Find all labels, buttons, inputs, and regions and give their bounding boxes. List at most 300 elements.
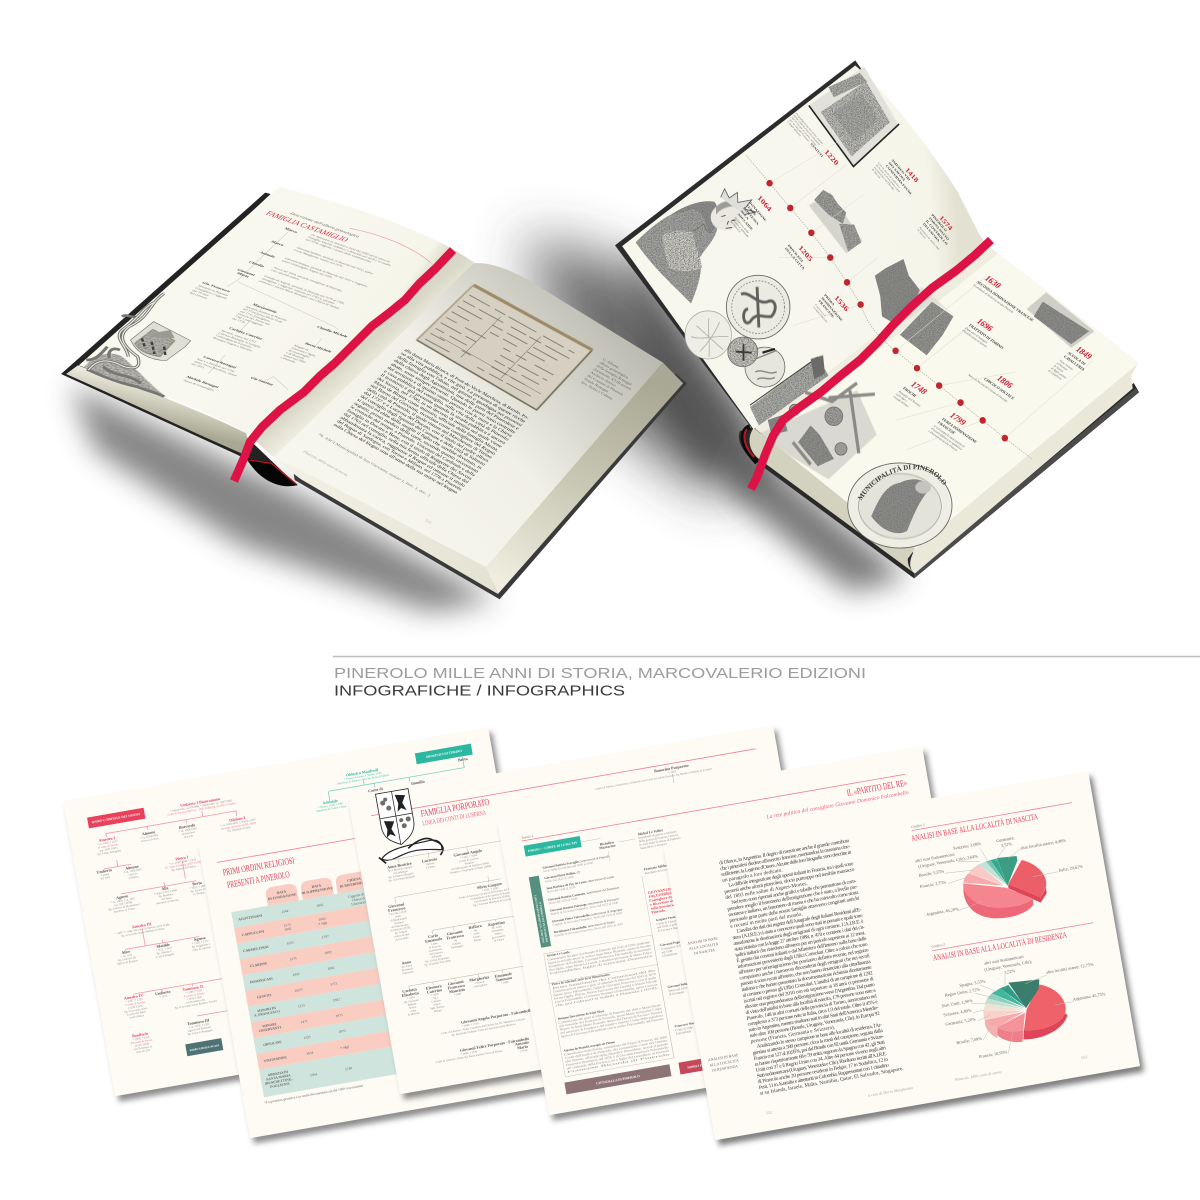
- table rows: GESUITI: [257, 993, 272, 1000]
- right page: [274, 263, 663, 567]
- 1536 Prima dominazione francese: 1536: [833, 294, 850, 313]
- 1849 Scuola di cavalleria: SCUOLA DI: [1066, 351, 1087, 366]
- 1799 Terza dominazione francese: [926, 408, 987, 456]
- family tree names: di Luserna: [429, 944, 442, 950]
- right column: political network: le sorti della Fortezza di Pinerolo: [639, 836, 681, 847]
- 1536 Prima dominazione francese: occupa Pinerolo: [812, 305, 829, 324]
- page block, far right side: [486, 363, 683, 594]
- boxed biographies: Nipote di Anne Marie Rouault, donna del Ducato di Savoia e Nicolas: [559, 1010, 664, 1033]
- 1799 Terza dominazione francese: 1799: [947, 410, 969, 427]
- pie labels: Argentina; 45,20%: [926, 906, 960, 918]
- right column: political network: Conte di Luserna: [656, 918, 679, 926]
- pie labels: [941, 954, 1106, 1060]
- table rows: 1749: [345, 1066, 353, 1071]
- wedge: altre località estere 4,48%: [997, 856, 1017, 886]
- table rows: 1625*: [294, 988, 304, 993]
- family tree names: del Marchesato di Saluzzo (1645): [451, 861, 489, 871]
- vertical banner: PRESIDIATA DA FALCOMBELLO: [539, 902, 549, 942]
- family tree names: Cattina: [452, 941, 462, 946]
- essay body text: iscritti nel registro del 2010 con età superiore ai 18 anni ci permette di: [743, 976, 875, 1005]
- essay body text: montese e italiano, un fenomeno di massa e che ha coinvolto come storia: [728, 889, 860, 918]
- essay body text: di Olmos, in Argentina. Il degno di menzione anche il grande contributo: [719, 838, 850, 867]
- pie labels: altre località estere; 12,75%: [1045, 961, 1095, 976]
- family tree biographies: Moglie di: [293, 344, 310, 351]
- 1799 Terza dominazione francese: Pinerolo dichiara la repubblica: [929, 426, 964, 451]
- red and grey family tree names: Sp. Guya di Borgogna: [187, 1028, 214, 1036]
- family tree names: Sp.: [474, 928, 478, 932]
- family tree names: Marco: [270, 240, 285, 247]
- family tree names: Antonio: [515, 1039, 529, 1047]
- family tree names: Sp. I Claudia Trucchetti: [424, 958, 451, 967]
- essay body text: che i pinerolesi diedero all'esercito francese, meritandosi la massima cinc-: [720, 843, 851, 872]
- table rows: 1802: [318, 917, 326, 922]
- infographic sheet 5: emigration analysis text and pie charts: [663, 770, 1144, 1146]
- chart heading two: ANALISI IN BASE ALLA LOCALITÀ DI RESIDENZA: [932, 929, 1068, 963]
- 1748 Trattato: sulle Alpi e: [895, 392, 909, 403]
- subtitle: linea dei conti di Luserna: LINEA DEI CONTI DI LUSERNA: [422, 810, 487, 827]
- red and grey family tree names: Aimone: [141, 829, 156, 836]
- wedge: Argentina 45,20%: [963, 883, 1033, 908]
- icon: Porporato coat of arms: [368, 784, 444, 865]
- title: famiglia Porporato: FAMIGLIA PORPORATO: [420, 797, 490, 820]
- left open book: [61, 187, 687, 599]
- 1064 Donazione: ADELAIDE: [737, 212, 754, 232]
- family tree names: conte: [410, 1008, 417, 1013]
- 1205 Prime istituzioni: [784, 237, 815, 271]
- pie labels: Francia; 3,75%: [920, 879, 947, 890]
- pie labels: Brasile; 5,55%: [918, 868, 945, 879]
- wedge: Spagna 3,55%: [992, 988, 1025, 1007]
- 1220 Statuti: Promulgazione dei primi statuti: [794, 111, 824, 145]
- family tree names: Anna: [401, 959, 411, 966]
- family tree names: Tarantaglio: [450, 943, 464, 950]
- 1849 Scuola di cavalleria: 1849: [1073, 344, 1095, 361]
- right column: political network: Francesco Moro: [674, 1021, 697, 1028]
- wedge: Regno Unito 2,72%: [987, 993, 1025, 1008]
- 1696 Trattato di Torino: [961, 314, 1014, 355]
- red and grey family tree names: Sp. in seconde nozze Matilde di Albon: [121, 926, 165, 938]
- main body text on right page of left book: Maria de Blonay come ministro, ufficiale della famiglia Meina,: [372, 380, 499, 453]
- marginal note on right page: Fondo Rostagni: [583, 377, 611, 394]
- banner: ramo savoia-acaia: [185, 1038, 223, 1056]
- family tree names: Maria: [517, 1044, 528, 1050]
- right column: political network: Saint-Mars e Fouquet: [640, 842, 667, 850]
- essay body text: Uniti con 37 e il Regno Unito con 34. Altre 44 persone vivono negli altri: [755, 1045, 887, 1074]
- family tree names: a Savigliano: [473, 982, 488, 989]
- timeline branch lines: [770, 139, 1093, 450]
- red and grey family tree names: IV conte di Savoia (1057-1078): [165, 860, 201, 870]
- caption line one: PINEROLO MILLE ANNI DI STORIA, MARCOVALERIO EDIZIONI: [334, 666, 866, 682]
- wedge: Germania 5,20%: [983, 1011, 1024, 1020]
- teal family tree names: Marchesa di Torino e Susa: [316, 804, 347, 813]
- table column headers: [265, 870, 374, 906]
- right column: political network: Sposa nel 1656: [668, 986, 688, 993]
- archival document photo: [417, 285, 592, 410]
- essay body text: di vista dell'analisi in base alla località di nascita, 179 persone sono nate a: [745, 988, 877, 1016]
- icon: coat of arms with baroque scroll ornament: [84, 293, 191, 397]
- red and grey family tree names: * 1244, † 1263: [132, 1035, 150, 1042]
- red and grey family tree names: di Lione: [184, 833, 195, 839]
- red and grey family tree names: Amedeo III: [131, 921, 152, 929]
- boxed biographies: nel processo di Fouquet e del nobile e famoso Uomo della maschera: [560, 1013, 664, 1035]
- essay body text: Perù, 11 in Australia e altrettanti in Colombia. Rappresentati con 1 cittadino: [758, 1062, 890, 1091]
- family tree names: Giovanni Angelo Porporato - Falcombello: [461, 1007, 533, 1025]
- family tree biographies: Speziario in Pinerolo: [197, 284, 229, 297]
- rule above the title: [217, 830, 402, 863]
- wedge: Argentina 45,75%: [1024, 984, 1066, 1030]
- red and grey family tree names: XII conte di Savoia: [130, 1037, 153, 1045]
- side note: località di nascita: ANALISI IN BASE: [687, 936, 718, 946]
- table rows: 1797: [322, 934, 329, 940]
- 1574 Pinerolo torna sotto i Savoia: ai Savoia: [917, 228, 927, 240]
- table rows: ORSOLINE: [263, 1040, 283, 1047]
- table rows: 1430: [292, 972, 300, 977]
- family tree names: abate: [395, 913, 402, 919]
- 1418 Amedeo VIII: di Savoia: [871, 168, 882, 180]
- family tree biographies: Consigliere e reggente: [194, 287, 229, 300]
- pie labels: (Uruguay, Venezuela, Cile);: [984, 959, 1032, 973]
- family tree names: dell'abate: [431, 953, 443, 959]
- heading: Famiglia Castamiglio: FAMIGLIA CASTAMIGLIO: [264, 210, 351, 243]
- spine and headband: [246, 458, 298, 486]
- 1574 Pinerolo torna sotto i Savoia: PINEROLO: [931, 213, 947, 233]
- table rows: 1802: [333, 997, 341, 1002]
- family tree names: Sp. conte: [491, 924, 503, 930]
- banner: arduinici: [415, 744, 473, 764]
- family tree biographies: Lorenzo Rostagni, la famiglia: [217, 332, 262, 349]
- wedge side faces: [963, 883, 1033, 918]
- essay body text: attualmente le destinazioni degli emigranti di ogni comune. L'A.I.R.E. è: [733, 918, 865, 947]
- family tree names: Conte di Luserna: [459, 856, 480, 863]
- right column: political network: GIOVANNI DOMENICO: [648, 884, 690, 895]
- family tree names: † 1704: [519, 1048, 528, 1053]
- table rows: [231, 877, 464, 1097]
- red and grey family tree names: del 1051: [100, 875, 111, 881]
- family tree names: Giovanni: [388, 901, 404, 909]
- family tree names: Sp. I Anna Porporato: [425, 955, 450, 963]
- family tree names: * 1680, † 1720: [460, 1049, 478, 1056]
- essay body text: di Pinerolo anche 20 persone residenti in Belgio, 17 in Sudafrica, 12 in: [757, 1056, 889, 1085]
- red and grey family tree names: Agnese: [193, 935, 206, 942]
- family tree names: Tommaso: [495, 975, 513, 983]
- red and grey family tree names: re d'Italia: [193, 890, 205, 896]
- table rows: 1544: [281, 909, 289, 914]
- list of academy members: Cognato di Giovanni Domenico, Socio dal 1632 al 1650: [552, 911, 623, 928]
- 1064 Donazione: TERRE: [745, 203, 757, 217]
- table rows: 1275: [289, 956, 297, 961]
- essay body text: un paragrafo a loro dedicato.: [722, 866, 783, 884]
- table column headers: DATA: [311, 884, 321, 889]
- red and grey family tree names: II conte di Savoia: [98, 842, 119, 850]
- engraving: seal of the Municipalità di Pinerolo: MUNICIPALITÀ DI PINEROLO: [858, 464, 946, 501]
- essay body text: italiana e che hanno presentato la documentazione richiesta direttamente: [741, 965, 873, 993]
- side note: località di residenza: DI RESIDENZA: [712, 1064, 738, 1073]
- table rows: 1802: [316, 903, 324, 908]
- boxed biographies: nel comando della Fortezza, ed è figlio del cancelliere di Pinerolo: [566, 1049, 670, 1071]
- table column headers: CHIESA: [347, 877, 361, 883]
- family tree names: del Marchesato: [391, 922, 409, 929]
- essay body text: Nel testo sono riportati anche grafici e tabelle che permettono di com-: [731, 877, 857, 906]
- page footers: a cura di Dario Marghesino: [867, 1085, 913, 1098]
- family tree names: Michele Rostagni: [185, 375, 221, 389]
- family tree names: Conte: [431, 941, 439, 946]
- 1220 Statuti: per la vita del Comune: [788, 117, 811, 143]
- family tree biographies: per 10 anni: [191, 289, 210, 297]
- family tree biographies: consigliere e reggente, acquista nel 1702 la speziale: [260, 277, 336, 305]
- table rows: 1275: [298, 1003, 306, 1009]
- right column: political network: della guerra di Francia, conosce: [639, 833, 679, 844]
- right column: political network: [581, 825, 718, 1067]
- rule with tavola label: [521, 769, 905, 841]
- table rows: 1773: [330, 982, 338, 987]
- teal family tree names: Immilla: [411, 779, 425, 786]
- red and grey family tree names: fino al 1259: [136, 1048, 151, 1054]
- 1536 Prima dominazione francese: Francesco I: [813, 302, 827, 318]
- red and grey family tree names: Umberto I Biancamano: [180, 796, 221, 808]
- wedge: altri stati sudamericani 2,64%: [978, 861, 1005, 884]
- table rows: 1975: [335, 1013, 343, 1018]
- 1574 Pinerolo torna sotto i Savoia: Restituzione della città: [918, 225, 941, 251]
- essay body text: nato in Argentina, mentre risultano nati in altri Stati dell'America Meridio-: [748, 1005, 880, 1033]
- wedge: altri stati sudamericani 3,52%: [1000, 985, 1025, 1007]
- upper page: [622, 66, 989, 429]
- main body text on right page of left book: seguito, primo medico della corte, secondo quanto raccontano: [352, 402, 480, 475]
- family tree names: Claudio Michele: [316, 325, 349, 338]
- red and grey family tree names: conte di Ginevra: [192, 945, 212, 952]
- family tree names: Carlotta Caterina: [228, 326, 264, 340]
- family tree names: Giovanni Felice Porporato - Falcombello: [459, 1036, 530, 1053]
- engraving: Scuola di cavalleria scene: [1027, 292, 1094, 348]
- 1696 Trattato di Torino: 1696: [974, 316, 996, 333]
- teal family tree names: * Torino, 1016, † 1091: [318, 801, 344, 809]
- 1064 Donazione: all'Abbazia: [730, 220, 742, 234]
- table rows: 1802: [324, 950, 332, 955]
- pie labels: Spagna; 3,55%: [959, 978, 986, 989]
- 1220 Statuti: del Principe di Acaia, norme: [791, 116, 818, 147]
- engraving: village on a scroll: [809, 190, 862, 254]
- chart heading two: Grafico 2: [931, 942, 945, 949]
- right open book: [615, 60, 1139, 578]
- table column headers: DI SOPPRESSIONE: [301, 886, 334, 895]
- essay body text: stero (A.I.R.E.) ci aiuta a conoscere quali sono stati in passato e quali sono: [732, 912, 863, 941]
- family tree names: Francesco: [446, 933, 464, 940]
- table rows: (BENEDETTINI) -: [265, 1077, 295, 1086]
- pie labels: altri stati Sudamericani: [915, 851, 956, 863]
- teal family tree names: * Torino, 4 secolo, † Torino, 1034: [343, 771, 382, 781]
- essay body text: Francia con 127 al 10,95%, poi dal Brasile con 92 unità. Germania e Svizze-: [753, 1034, 885, 1062]
- family tree biographies: di Castamiglio: [288, 349, 311, 359]
- main body text on right page of left book: si sposò ed ebbe dalla moglie il figlio che sarebbe divenuto, in: [355, 398, 483, 471]
- 1696 Trattato di Torino: Pinerolo torna ai Savoia: [961, 328, 988, 348]
- family tree biographies: del Comune.: [189, 291, 209, 300]
- main body text on right page of left book: so alla vita pubblica, e che girò. La presenza di queste ricche: [399, 352, 526, 424]
- 1849 Scuola di cavalleria: a Pinerolo: [1055, 361, 1069, 371]
- table rows: FOGLIENSI: [270, 1082, 291, 1089]
- main body text on right page of left book: e casa pubblica del consiglio, sulla vita della città di Pinerolo: [382, 370, 510, 442]
- teal family tree names: [311, 752, 472, 813]
- spine and headband: [743, 427, 757, 463]
- family tree biographies: nel 1734, sposa Maria Gatti: [241, 308, 283, 324]
- red and grey family tree names: * 1197, † 1253: [126, 997, 143, 1004]
- main body text on right page of left book: della famiglia con l'abate, nel giorno e guadagna nei possessi: [396, 355, 524, 428]
- pie labels: Francia; 10,95%: [979, 1049, 1008, 1060]
- red and grey family tree names: * 1051, † 1087: [189, 883, 207, 890]
- red and grey family tree names: Bonifacio: [132, 1031, 149, 1038]
- banner: Parigi corte di Luigi XIV: [524, 836, 582, 857]
- pie labels: 3,52%: [1004, 968, 1016, 976]
- family tree biographies: Castamiglio ha il termine: [215, 334, 253, 349]
- page block, bottom right side: [274, 457, 498, 594]
- red and grey family tree names: signore di Beaujeu: [117, 958, 139, 966]
- family tree biographies: ammessa e presso Maria Rostagni, cura Chiesa di Torino.: [257, 280, 341, 310]
- family tree names: Marco: [283, 227, 299, 234]
- leader lines: [972, 974, 1073, 1053]
- red and grey family tree names: Sp. Bonifacio: [158, 892, 175, 898]
- red and grey family tree names: Agnese: [116, 893, 129, 900]
- family tree names: notaio di Sabina, si trasferisce a Pinerolo al servizio del nobile Renzetti. Sp. Beatrice Pellizza di Fossano: [595, 767, 713, 791]
- family tree names: * 1676: [431, 992, 440, 997]
- family tree names: Emanuele: [494, 971, 512, 979]
- essay body text: [719, 836, 904, 1097]
- main body text on right page of left book: 78. ASCI Municipalità di San Giovanni, mazzo 1, fasc. 1, doc. 1: [317, 432, 432, 498]
- red and grey family tree names: del Vasto,: [161, 895, 173, 901]
- red and grey family tree names: vescovo di Sion: [140, 836, 160, 843]
- teal family tree names: Adelaide: [322, 798, 338, 805]
- right column: political network: Michel Le Tellier: [637, 828, 664, 837]
- red and grey family tree names: * ca. 1010/1020, † Torino, 1057: [220, 817, 257, 828]
- timeline dashed axis: [746, 155, 1032, 459]
- family tree names: Brotto: [474, 937, 482, 942]
- family tree biographies: Giovanni battista, speziale in Pinerolo nel 1652, sposa: [295, 246, 375, 276]
- main body text on right page of left book: nel Baron del Giovanni, ricordato come consigliere del Regno: [369, 384, 497, 457]
- essay body text: L'analisi dei dati dei registri dell'Anagrafe degli Italiani Residenti all'E-: [736, 906, 862, 935]
- family tree names: Sp.I: [433, 995, 438, 1000]
- red and grey family tree names: di Belley: [128, 874, 140, 880]
- family tree names: Caterina: [426, 987, 442, 995]
- table rows: 1575: [283, 923, 291, 928]
- red and grey family tree names: Sp. Guglielmo I: [192, 942, 210, 949]
- table rows: ABBAZIA DI: [267, 1070, 288, 1077]
- pie labels: altri stati Sudamericani: [984, 954, 1025, 966]
- essay body text: Pinerolo, 148 in altri comuni della provincia di Torino, ammontano nel: [746, 993, 878, 1022]
- wedge: Italia 29,62%: [1008, 860, 1046, 897]
- boxed biographies: [544, 935, 674, 1077]
- essay body text: al comune o presso gli Uffici Consolari. L'analisi di un campione di 1292: [742, 969, 874, 999]
- list of academy members: [542, 853, 626, 939]
- boxed biographies: Commissario della Piazza, comandante del Regno di Francia, dal 1668: [564, 1035, 668, 1058]
- red ribbon bookmark, left book: [234, 250, 453, 481]
- essay body text: sufficiente, la Legione d'Onore. Alcune delle loro biografie sono descritte in: [721, 848, 852, 878]
- family tree names: Senatore e Segretario di Stato (1664): [450, 864, 492, 875]
- family tree biographies: Fratello di Angelo, speziale di Pinerolo dal 1679 al 1706,: [262, 275, 346, 306]
- red headband: [745, 429, 754, 457]
- family tree names: Cesare: [473, 934, 482, 939]
- 1418 Amedeo VIII: di Acaia, il Principato viene: [875, 163, 902, 194]
- family tree names: Caluisio: [431, 998, 442, 1004]
- family tree names: Baffara: [468, 923, 482, 930]
- table rows: 1802: [284, 927, 292, 932]
- family tree biographies: Giovanni battista, speziale in Pinerolo dal 1692 e reggente,: [283, 257, 369, 288]
- table rows: MINORI DI: [257, 1006, 276, 1013]
- 1064 Donazione: DONAZIONE: [748, 201, 767, 223]
- family tree names: Carlotta: [402, 986, 417, 994]
- 1806 Circolo speciale: [966, 360, 1025, 405]
- pie chart 2: località di residenza: [941, 954, 1106, 1060]
- 1696 Trattato di Torino: TRATTATO DI TORINO: [967, 323, 1004, 350]
- right column: political network: François Michel Le Tellier: [643, 861, 684, 871]
- right column: political network: Consigliere di Stato: [661, 943, 686, 951]
- family tree names: * 1690, † 1710: [461, 1021, 479, 1028]
- family tree biographies: sposa Castamiglio Angela nel 1699.: [281, 259, 334, 279]
- family tree names: di Moretta: [407, 1011, 421, 1017]
- 1806 Circolo speciale: CIRCOLO SOCIALE: [983, 377, 1016, 401]
- marginal note on right page: Archivio Storico: [589, 370, 617, 387]
- table rows: 1634: [306, 1051, 314, 1056]
- family tree names: vedova di uno: [393, 932, 410, 939]
- side note: località di nascita: ALLA LOCALITÀ: [688, 941, 719, 951]
- red and grey family tree names: vedi di Baux: [130, 1013, 145, 1020]
- essay body text: Stati sudamericani (Uruguay, Venezuela e Cile). Risultano iscritti all'A.I.R.E.: [756, 1050, 887, 1080]
- wedge: Svizzera 3,08%: [986, 860, 1006, 884]
- boxed biographies: dal comando del Fortezza di Pinerolo, sposa Marie Antoinette Collot: [559, 1006, 662, 1029]
- boxed biographies: Sua figlia, Anne Marie La Lande, è madrina personale di Maria Felice: [549, 950, 653, 973]
- red and grey family tree names: Tommaso III: [187, 1017, 210, 1026]
- pie chart 1: località di nascita: [915, 835, 1084, 918]
- red and grey family tree names: Aimone: [125, 864, 139, 871]
- red and grey family tree names: (1233-1253): [128, 1004, 143, 1010]
- main body text on right page of left book: Il territorio è già presente quando la strada pubblica è ancora: [379, 373, 507, 446]
- table rows: Cappella di S.: [348, 892, 368, 899]
- side note: località di residenza: ANALISI IN BASE: [708, 1053, 739, 1062]
- family tree names: Giovanni: [446, 929, 463, 936]
- title: il partito del re: IL «PARTITO DEL RE»: [846, 778, 908, 799]
- family tree names: † 1563: [668, 769, 677, 775]
- 1064 Donazione: Contessa Adelaide: [732, 218, 750, 239]
- 1806 Circolo speciale: 1806: [994, 373, 1016, 390]
- marginal note on right page: C. Alfonsi,: [601, 357, 621, 370]
- table column headers: DATA: [276, 890, 286, 895]
- red and grey family tree names: Umberto: [155, 989, 171, 996]
- family tree names: Senatore: [464, 860, 475, 866]
- boxed biographies: Antoine de Brandit, marquis de Pienne: [563, 1040, 616, 1053]
- banner: arduinici: ARDUINICI DI TORINO: [425, 749, 463, 759]
- infographic sheet 2: religious orders table: [198, 768, 679, 1144]
- family tree names: Margherita: [469, 974, 489, 983]
- family tree names: Giovanni: [236, 268, 257, 277]
- 1418 Amedeo VIII: CONFERMA FEUDI: [885, 164, 913, 196]
- banner: cittadella di Pinerolo: CITTADELLA DI PINEROLO: [596, 1074, 641, 1086]
- main body text on right page of left book: della città di Pinerolo, il quale rimase nel Marchesato di Torino: [366, 388, 493, 460]
- red and grey family tree names: † ca. 1054/1055: [123, 867, 142, 874]
- essay body text: gentina si attesta a 589 persone, circa la metà del campione, seguita dalla: [752, 1028, 884, 1056]
- pie labels: Argentina; 45,75%: [1072, 991, 1106, 1003]
- essay body text: personale gran parte delle nostre famiglie attraverso congiunti antichi: [729, 895, 861, 924]
- family tree names: Sp. I Giovanni Bergalio: [388, 874, 416, 883]
- pie labels: Brasile; 7,09%: [956, 1036, 983, 1046]
- family tree names: Sp. Carlo: [401, 963, 413, 969]
- table rows: 1655: [287, 940, 294, 946]
- family tree names: * 1674: [407, 995, 416, 1000]
- family tree biographies: sposa Teresa Paschetta, muore: [192, 360, 239, 378]
- main body text on right page of left book: le cronache del tempo, a Pinerolo. Vincenzo del Cardinale e della: [349, 405, 477, 478]
- red and grey family tree names: * ca. 1125: [120, 952, 133, 958]
- table rows: 1320: [303, 1035, 311, 1040]
- wedge: altre località estere 12,75%: [1008, 979, 1039, 1008]
- main body text on right page of left book: dal 1737 e a Lucerna del Ducato, con il titolo del padre allora: [362, 391, 490, 464]
- pie labels: Svizzera; 3,08%: [953, 841, 982, 852]
- red and grey family tree names: Cecilia del Balzo: [127, 1009, 147, 1017]
- marginal note on right page: [580, 357, 642, 404]
